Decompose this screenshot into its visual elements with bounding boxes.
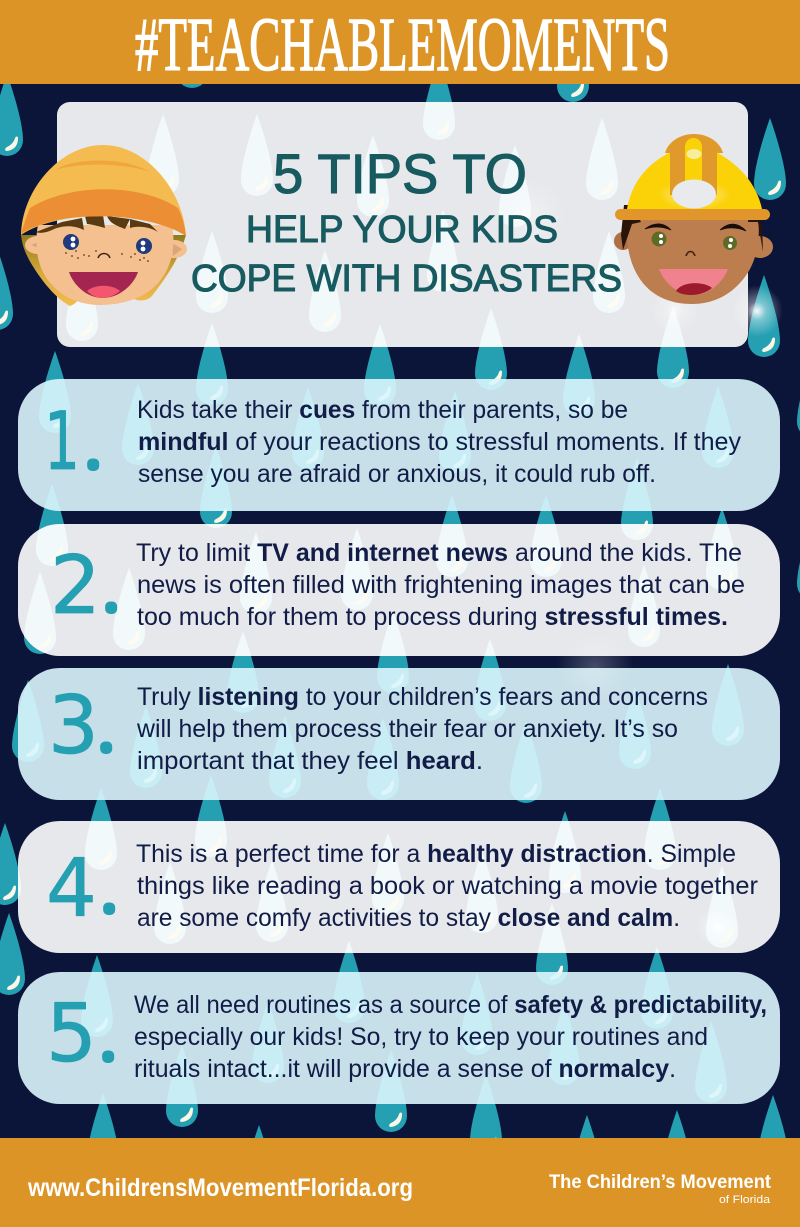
sparkle glows (492, 177, 783, 949)
panel: tip 1 background (18, 379, 780, 511)
tip 3 number: . (103, 730, 109, 754)
tip 2 text (136, 539, 745, 631)
tip 5 number: . (105, 1039, 111, 1063)
tip 5 (46, 987, 767, 1083)
tip 5 text (134, 991, 767, 1083)
footer band (0, 1138, 800, 1227)
panel: title card (57, 102, 748, 347)
tip 3 text: Truly listening to your children’s fears and concerns (137, 683, 708, 711)
icon: child with yellow miner helmet (614, 134, 773, 304)
tip 1 text: Kids take their cues from their parents, so be (137, 396, 628, 424)
logo: The Children's Movement of Florida (549, 1172, 772, 1206)
header band (0, 0, 800, 87)
tip 2 text: news is often filled with frightening images that can be (137, 571, 745, 599)
tip 3 number: 3 (48, 679, 99, 772)
tip 5 text: rituals intact...it will provide a sense of normalcy. (134, 1055, 676, 1083)
tip 4 number: 4 (46, 842, 97, 935)
tip 4 text: things like reading a book or watching a movie together (137, 872, 758, 900)
tip 4 text (136, 840, 758, 932)
tip 2 text: Try to limit TV and internet news around the kids. The (136, 539, 742, 567)
panel: tip 5 background (18, 972, 780, 1104)
tip 5 text: We all need routines as a source of safety & predictability, (134, 991, 767, 1019)
tip 5 number: 5 (46, 987, 97, 1080)
heading: 5 tips to help your kids cope with disasters: 5 TIPS TO (273, 142, 527, 205)
tip 5 text: especially our kids! So, try to keep your routines and (134, 1023, 708, 1051)
tip 3 text (136, 683, 708, 775)
heading: 5 tips to help your kids cope with disasters (191, 142, 622, 300)
tip 4 (46, 840, 758, 935)
logo: The Children's Movement of Florida: of Florida (719, 1194, 771, 1206)
panel: tip 3 background (18, 668, 780, 800)
tip 2 text: too much for them to process during stressful times. (137, 603, 728, 631)
tip 1 number: . (90, 447, 96, 471)
tip 4 number: . (106, 891, 112, 915)
tip 3 text: important that they feel heard. (137, 747, 483, 775)
tip 3 (48, 679, 708, 775)
tip 4 text: are some comfy activities to stay close and calm. (137, 904, 680, 932)
logo: The Children's Movement of Florida: The Children’s Movement (549, 1172, 772, 1193)
lightened drops on grey panels (18, 102, 738, 953)
tip 1 text: sense you are afraid or anxious, it could rub off. (138, 460, 656, 488)
heading: 5 tips to help your kids cope with disasters: COPE WITH DISASTERS (191, 258, 622, 300)
tip 2 number: . (108, 590, 114, 614)
tip 1 text (137, 396, 741, 488)
tip 2 number: 2 (50, 539, 101, 632)
heading: 5 tips to help your kids cope with disasters: HELP YOUR KIDS (246, 209, 558, 251)
tip 1 text: mindful of your reactions to stressful moments. If they (138, 428, 741, 456)
tip 4 text: This is a perfect time for a healthy distraction. Simple (136, 840, 736, 868)
tip 2 (50, 539, 745, 632)
tip 1 (44, 395, 741, 488)
panel: tip 2 background (18, 524, 780, 656)
tip 3 text: will help them process their fear or anxiety. It’s so (136, 715, 678, 743)
website url: www.ChildrensMovementFlorida.org (27, 1174, 413, 1202)
tip 1 number: 1 (44, 395, 80, 488)
icon: child with orange hat (21, 145, 187, 306)
panel: tip 4 background (18, 821, 780, 953)
